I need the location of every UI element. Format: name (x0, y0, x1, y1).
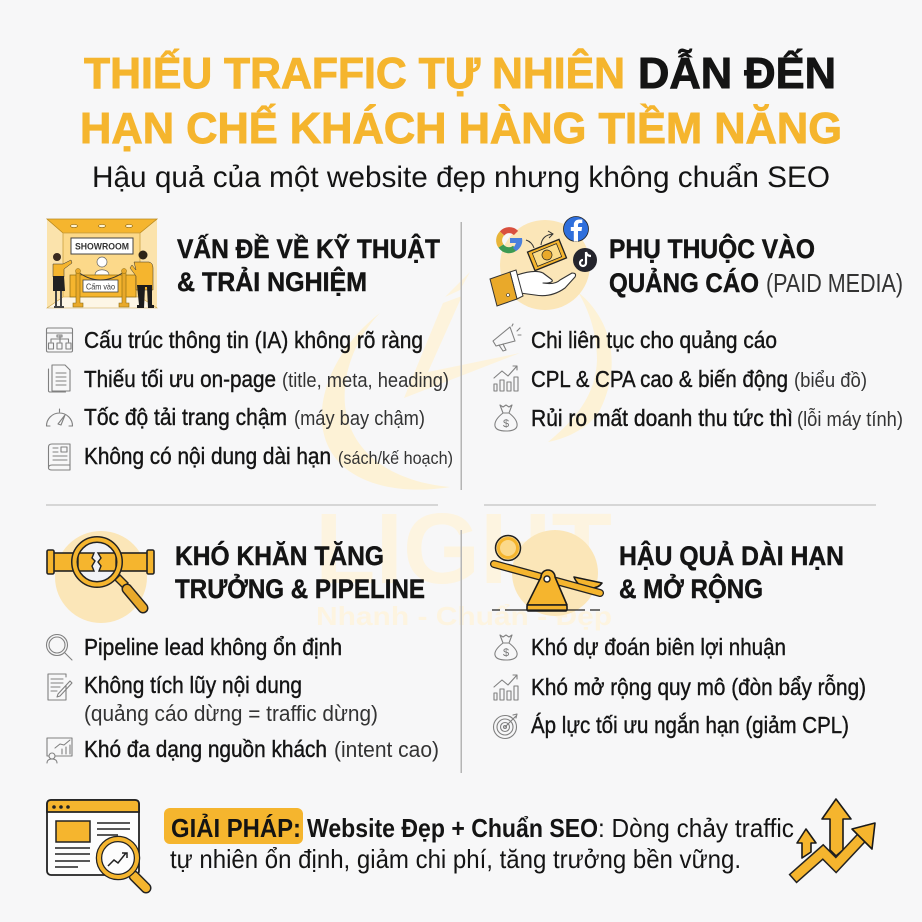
icon: growth arrows (797, 799, 875, 875)
solution text (170, 813, 794, 874)
icon: showroom: Cấm vào (86, 282, 115, 292)
title: HẠN CHẾ KHÁCH HÀNG TIỀM NĂNG (80, 103, 842, 153)
list item: on-page: (title, meta, heading) (282, 370, 449, 392)
watermark: logo and brand (315, 272, 612, 631)
list item: content accumulation: (quảng cáo dừng = traffic dừng) (84, 701, 378, 726)
list item: content accumulation (48, 672, 378, 726)
title: DẪN ĐẾN (638, 48, 836, 98)
icon: showroom: SHOWROOM (75, 242, 129, 252)
list item: page speed: Tốc độ tải trang chậm (84, 404, 287, 430)
heading (619, 539, 844, 604)
list item: short-term pressure: Áp lực tối ưu ngắn hạn (giảm CPL) (531, 712, 849, 738)
panel: solution (47, 799, 875, 888)
heading (175, 540, 425, 604)
list item: revenue loss risk: (lỗi máy tính) (797, 408, 903, 431)
list item: pipeline lead: Pipeline lead không ổn định (84, 634, 342, 660)
title (80, 48, 842, 153)
watermark: logo and brand: LIGHT (315, 493, 612, 605)
title: THIẾU TRAFFIC TỰ NHIÊN (84, 48, 625, 98)
list item: long-term content: (sách/kế hoạch) (338, 448, 453, 468)
list item: page speed: (máy bay chậm) (294, 408, 425, 430)
list item: on-page (48, 365, 449, 392)
icon: hand, money and ad platforms (490, 216, 597, 310)
icon: showroom (47, 219, 157, 308)
list item: customer sources: (intent cao) (334, 737, 439, 762)
list item: page speed (46, 404, 425, 430)
list item: scaling: Khó mở rộng quy mô (đòn bẩy rỗng) (531, 674, 866, 700)
list item: information architecture: Cấu trúc thông tin (IA) không rõ ràng (84, 327, 423, 353)
list item: long-term content (48, 443, 453, 470)
list item: continuous ad spend: Chi liên tục cho quảng cáo (531, 327, 777, 353)
heading: QUẢNG CÁO (609, 266, 759, 298)
panel: technical and experience issues (46, 219, 453, 470)
list item: revenue loss risk: Rủi ro mất doanh thu tức thì (531, 405, 793, 431)
heading: & TRẢI NGHIỆM (177, 265, 367, 297)
list item: long-term content: Không có nội dung dài hạn (84, 443, 331, 469)
list item: customer sources (47, 736, 439, 763)
highlight label: GIẢI PHÁP: (171, 813, 301, 843)
panel: paid media dependency (490, 216, 903, 431)
icon: web page with magnifier (47, 800, 146, 888)
heading: HẬU QUẢ DÀI HẠN (619, 539, 844, 571)
list item: on-page: Thiếu tối ưu on-page (84, 366, 276, 392)
heading (609, 233, 903, 298)
list item: content accumulation: Không tích lũy nội dung (84, 672, 302, 698)
panel: growth and pipeline difficulty (46, 531, 439, 763)
icon: broken pipe under magnifier (47, 531, 154, 623)
list item: CPL and CPA: (biểu đồ) (794, 370, 867, 392)
solution text: Website Đẹp + Chuẩn SEO (307, 813, 598, 843)
subtitle: Hậu quả của một website đẹp nhưng không chuẩn SEO (92, 161, 830, 194)
list item: CPL and CPA: CPL & CPA cao & biến động (531, 366, 788, 392)
list item: profit margin: Khó dự đoán biên lợi nhuận (531, 634, 786, 660)
list item: customer sources: Khó đa dạng nguồn khách (84, 736, 327, 762)
heading: VẤN ĐỀ VỀ KỸ THUẬT (177, 233, 440, 264)
solution text: tự nhiên ổn định, giảm chi phí, tăng trưởng bền vững. (170, 844, 741, 874)
heading (177, 233, 440, 297)
list item: profit margin: $ (503, 647, 509, 659)
solution text: : Dòng chảy traffic (598, 813, 794, 843)
dividers (46, 222, 876, 773)
list item: revenue loss risk: $ (503, 418, 509, 430)
panel: long-term consequences (492, 530, 866, 738)
heading: PHỤ THUỘC VÀO (609, 233, 815, 264)
watermark: logo and brand: Nhanh - Chuẩn - Đẹp (316, 601, 612, 631)
icon: tilted scale with coin (492, 530, 602, 616)
heading: & MỞ RỘNG (619, 572, 763, 604)
heading: TRƯỞNG & PIPELINE (175, 572, 425, 604)
heading: KHÓ KHĂN TĂNG (175, 540, 384, 571)
